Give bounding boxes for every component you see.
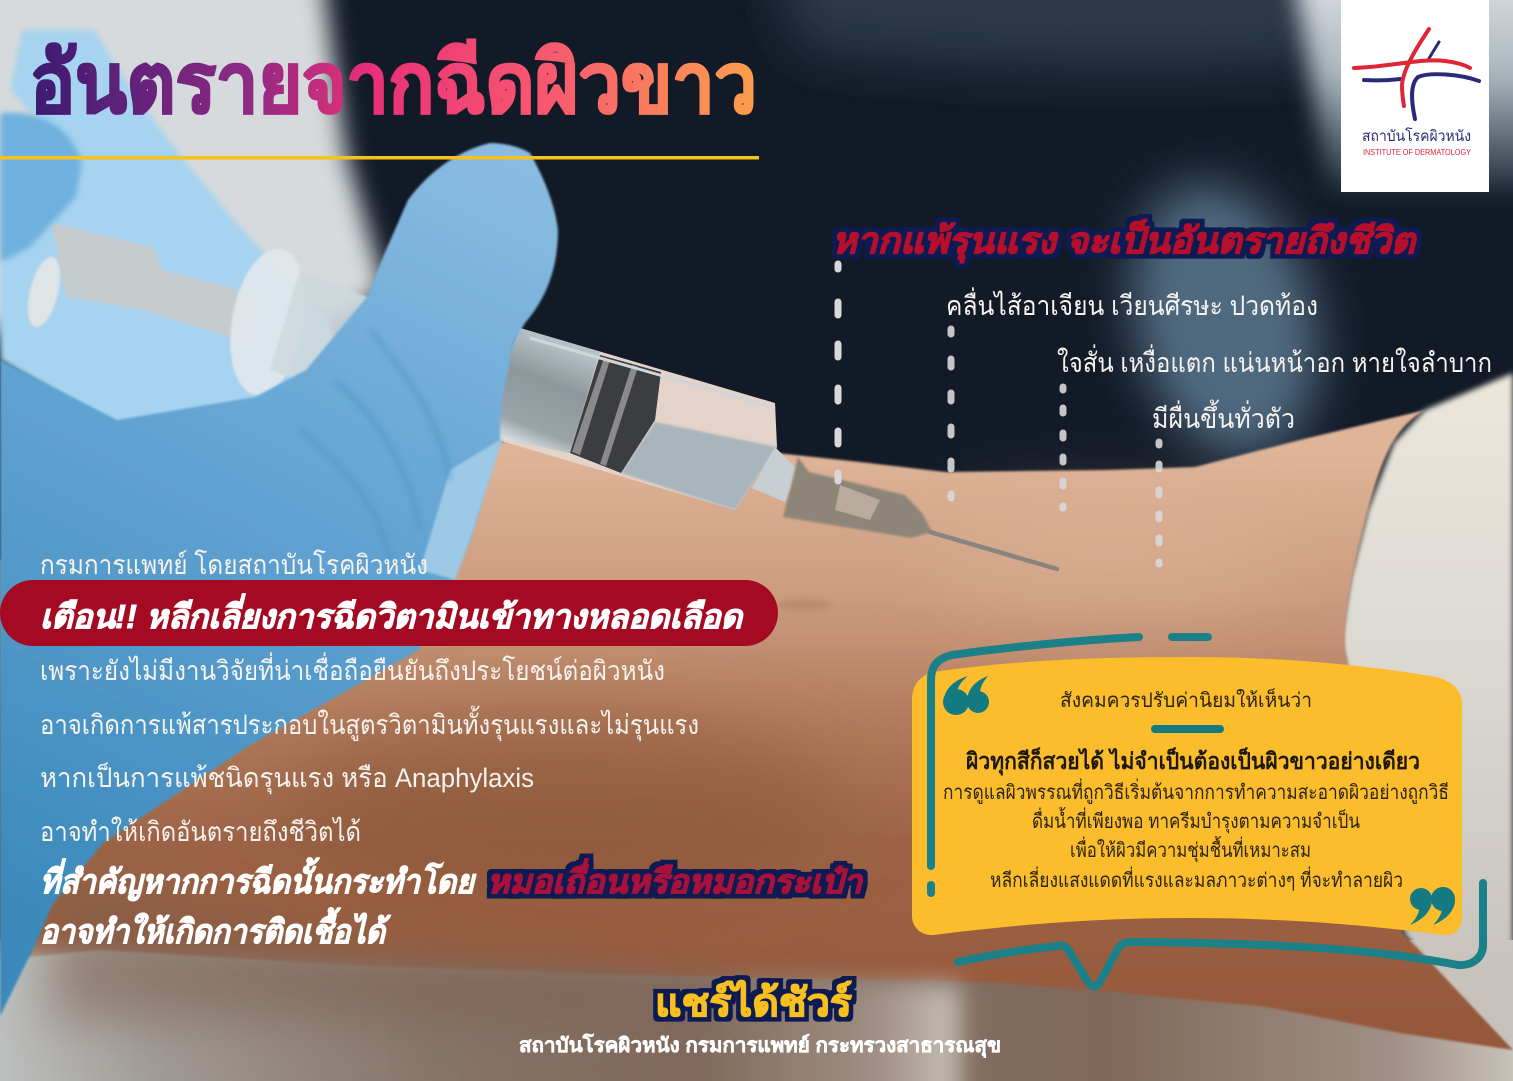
symptom 3: มีผื่นขึ้นทั่วตัว — [1152, 399, 1295, 434]
symptom 1: คลื่นไส้อาเจียน เวียนศีรษะ ปวดท้อง — [946, 287, 1318, 321]
dotted leader 2 — [948, 329, 954, 498]
title: อันตรายจากฉีดผิวขาว — [30, 36, 757, 130]
advice line 4: หลีกเลี่ยงแสงแดดที่แรงและมลภาวะต่างๆ ที่จะทำลายผิว — [990, 866, 1403, 892]
teal divider bar — [1151, 725, 1224, 733]
illustration: gloved hand — [0, 113, 558, 1016]
advice line 1: การดูแลผิวพรรณที่ถูกวิธีเริ่มต้นจากการทำความสะอาดผิวอย่างถูกวิธี — [943, 778, 1449, 805]
logo English name: INSTITUTE OF DERMATOLOGY — [1363, 148, 1472, 157]
heading: severe allergy warning: หากแพ้รุนแรง จะเป็นอันตรายถึงชีวิต — [832, 219, 1418, 263]
footer organisation credit: สถาบันโรคผิวหนัง กรมการแพทย์ กระทรวงสาธารณสุข — [519, 1033, 1001, 1058]
highlighted emphasis: quack doctors: หมอเถื่อนหรือหมอกระเป๋า — [487, 858, 863, 900]
footer slogan: แชร์ได้ชัวร์ — [655, 980, 852, 1025]
callout yellow panel — [912, 657, 1462, 935]
background photo: white sleeve — [1340, 373, 1513, 1060]
symptom list with dotted leader lines — [838, 264, 1492, 564]
dotted leader 1 — [834, 264, 842, 481]
red warning pill — [0, 580, 778, 646]
advice line 2: ดื่มน้ำที่เพียงพอ ทาครีมบำรุงตามความจำเป็น — [1032, 807, 1360, 834]
callout: speech bubble quote — [912, 637, 1483, 986]
dotted leader 4 — [1156, 442, 1162, 564]
intro line: กรมการแพทย์ โดยสถาบันโรคผิวหนัง — [40, 549, 428, 580]
callout teal dash — [1172, 633, 1208, 641]
paragraph line 2: อาจเกิดการแพ้สารประกอบในสูตรวิตามินทั้งรุนแรงและไม่รุนแรง — [40, 705, 699, 742]
paragraph line 3: หากเป็นการแพ้ชนิดรุนแรง หรือ Anaphylaxis — [40, 760, 534, 795]
logo panel — [1341, 0, 1489, 192]
bold infection line: อาจทำให้เกิดการติดเชื้อได้ — [40, 907, 391, 950]
logo Thai name: สถาบันโรคผิวหนัง — [1362, 127, 1471, 145]
intro line: สังคมควรปรับค่านิยมให้เห็นว่า — [1060, 687, 1312, 712]
illustration: syringe barrel — [474, 328, 798, 510]
illustration: syringe plunger — [22, 223, 375, 401]
paragraph line 4: อาจทำให้เกิดอันตรายถึงชีวิตได้ — [40, 816, 361, 847]
bold emphasis line: ที่สำคัญหากการฉีดนั้นกระทำโดย — [40, 857, 476, 902]
text block: main warning — [0, 549, 863, 950]
dotted leader 3 — [1060, 387, 1066, 508]
background photo: blue glove sleeve behind syringe — [0, 30, 345, 430]
bold statement: ผิวทุกสีก็สวยได้ ไม่จำเป็นต้องเป็นผิวขาวอย่างเดียว — [966, 746, 1420, 776]
logo mark — [1354, 29, 1479, 119]
closing quote mark — [1410, 887, 1455, 925]
red warning pill: เตือน!! หลีกเลี่ยงการฉีดวิตามินเข้าทางหลอดเลือด — [40, 593, 745, 635]
callout teal outline bottom with pointer — [958, 883, 1483, 986]
paragraph line 1: เพราะยังไม่มีงานวิจัยที่น่าเชื่อถือยืนยันถึงประโยชน์ต่อผิวหนัง — [40, 652, 665, 686]
advice line 3: เพื่อให้ผิวมีความชุ่มชื้นที่เหมาะสม — [1070, 836, 1311, 863]
title underline — [0, 156, 759, 160]
background photo: arm skin — [0, 410, 1513, 1081]
background photo: lower grey surface — [0, 940, 1513, 1081]
callout teal dot — [927, 885, 935, 893]
illustration: needle hub and needle — [783, 457, 1057, 569]
callout teal outline top — [931, 637, 1139, 866]
opening quote mark — [943, 676, 989, 715]
